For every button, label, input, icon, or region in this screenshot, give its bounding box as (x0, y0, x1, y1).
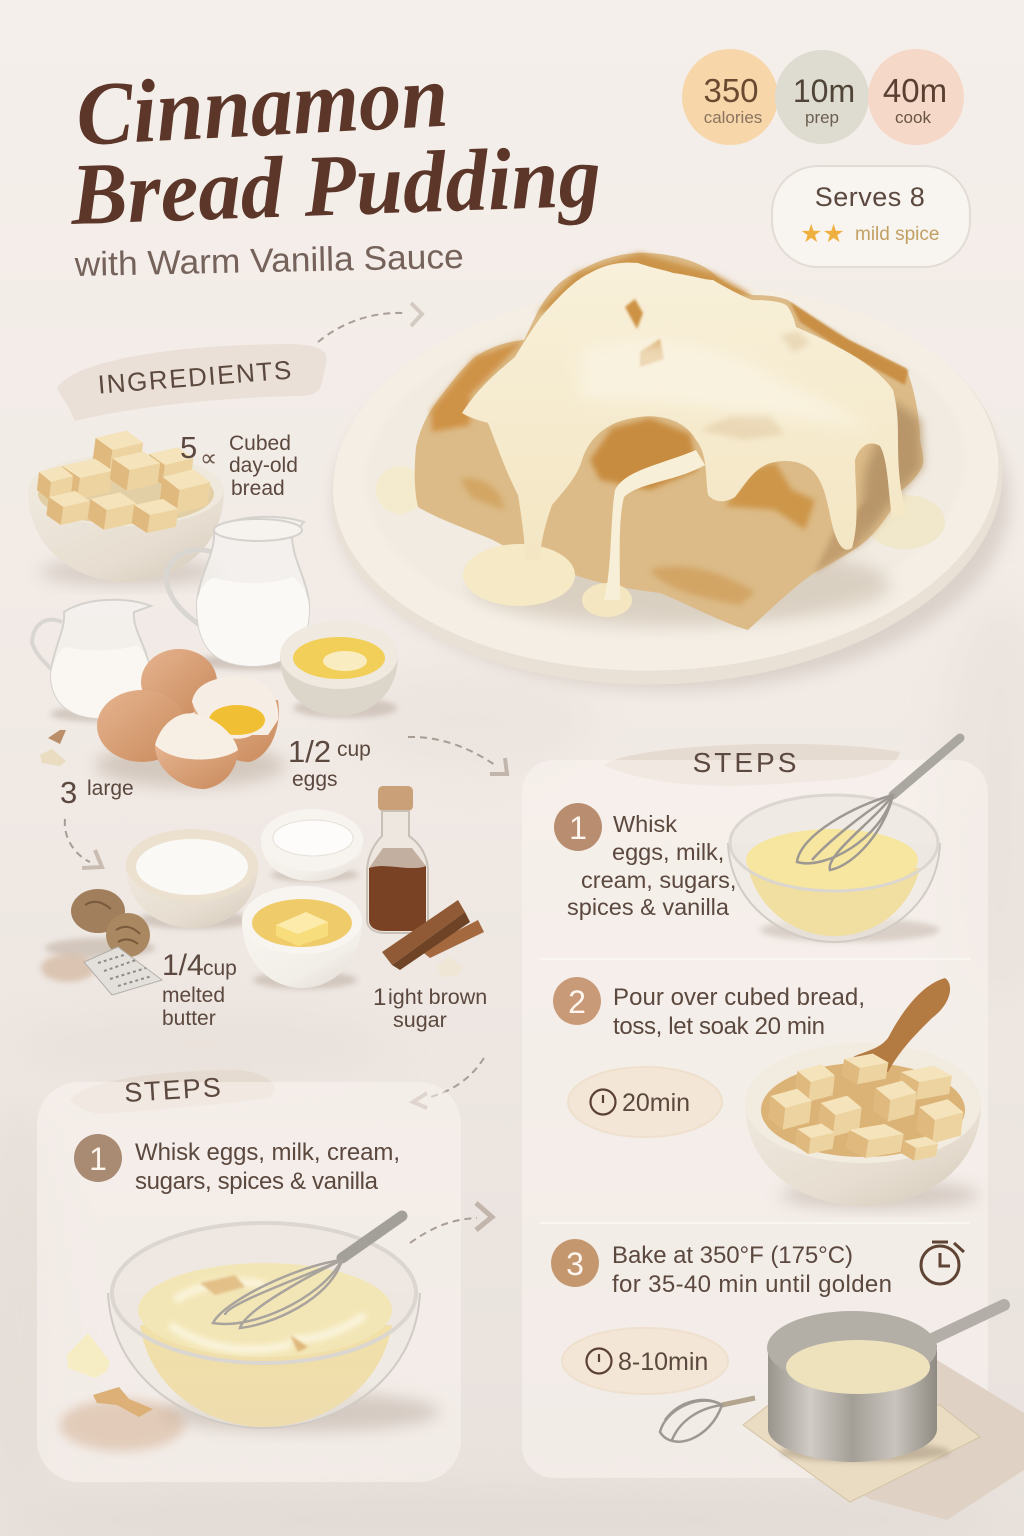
label: eggs (288, 734, 371, 791)
timer pill: 8-10min (618, 1348, 708, 1376)
badge: cook (868, 49, 964, 145)
heading: INGREDIENTS (97, 354, 294, 400)
number badge 1: 1 (89, 1141, 107, 1177)
label: 3 large (60, 775, 134, 810)
banner (603, 744, 900, 786)
panel: left steps (37, 1070, 461, 1482)
step text (567, 811, 736, 920)
timer pill (568, 1067, 722, 1137)
badge: cook: cook (895, 108, 931, 127)
ingredient: cinnamon sticks (382, 900, 484, 970)
spice stars: ★★ (800, 220, 845, 248)
label: bread: bread (231, 477, 285, 500)
icon: timer (921, 1242, 964, 1284)
step text: spices & vanilla (567, 894, 730, 920)
step text: for 35-40 min until golden (612, 1271, 892, 1298)
panel background (522, 760, 988, 1478)
glass bowl and whisk (728, 738, 960, 942)
label: eggs: cup (337, 738, 371, 761)
step text: Pour over cubed bread, (613, 984, 865, 1011)
wooden board (743, 1400, 980, 1502)
arrow: eggs to steps (408, 737, 507, 774)
spice powder (41, 954, 95, 982)
butter cube (67, 1333, 110, 1378)
banner (70, 1070, 275, 1114)
number badge (554, 803, 602, 851)
label: brown sugar: 1 (373, 984, 386, 1011)
cracked egg with yolk (192, 677, 279, 762)
label: bread: Cubed (229, 432, 291, 455)
step 2 (553, 977, 981, 1209)
step 3 (551, 1239, 1024, 1520)
number badge: 3 (566, 1246, 584, 1282)
saucepan (767, 1305, 1004, 1462)
badge: calories: calories (704, 108, 762, 127)
timer pill (562, 1328, 728, 1394)
label: butter: 1/4 (162, 949, 204, 982)
small whisk (660, 1398, 755, 1442)
subtitle: with Warm Vanilla Sauce (73, 238, 464, 284)
badge: cook: 40m (883, 72, 947, 109)
garlic crumb (437, 957, 463, 977)
label: bread: day-old (229, 454, 298, 477)
label: brown sugar: sugar (393, 1008, 447, 1032)
towel (800, 1360, 1024, 1520)
arrow: title to plate (318, 303, 422, 342)
label: butter (162, 949, 237, 1030)
label: eggs: eggs (292, 768, 338, 791)
label: butter: cup (203, 957, 237, 980)
label: brown sugar (373, 984, 487, 1032)
right sauce pool (865, 495, 945, 549)
label: 3 large: large (87, 777, 134, 800)
badge: prep: prep (805, 108, 839, 127)
nut crumbs (40, 730, 66, 766)
label: butter: butter (162, 1007, 216, 1030)
number badge 1 (74, 1134, 122, 1182)
label: butter: melted (162, 984, 225, 1007)
left sauce pool (376, 466, 424, 514)
panel: right steps (522, 738, 1024, 1520)
badge: calories: 350 (703, 72, 759, 109)
bowl of soaked bread with spoon (745, 978, 981, 1209)
step text (613, 984, 865, 1040)
title line: Bread Pudding: Bread Pudding (68, 129, 602, 244)
spice label: mild spice (855, 224, 939, 245)
label: bread: 5 (180, 430, 197, 465)
ingredient: bread cubes bowl (28, 431, 224, 586)
label: brown sugar: ight brown (388, 985, 487, 1009)
ingredient: nutmegs (45, 889, 155, 958)
plate with bread pudding (321, 253, 1013, 701)
badge: prep (775, 50, 869, 144)
divider glow (540, 1222, 970, 1224)
vanilla sauce (462, 263, 908, 617)
step text: Bake at 350°F (175°C) (612, 1242, 853, 1269)
label: bread (180, 430, 298, 500)
arrow: left panel to right panel (410, 1203, 492, 1243)
heading: STEPS (123, 1072, 224, 1108)
title line: Cinnamon: Cinnamon (74, 47, 451, 165)
heading: STEPS (693, 747, 799, 778)
pudding slice (415, 253, 923, 630)
pudding shadow (470, 545, 890, 625)
ingredient: sugar bowl (126, 829, 258, 929)
ingredient: small milk jug (32, 600, 151, 722)
number badge: 1 (569, 810, 587, 846)
serves text: Serves 8 (815, 182, 925, 212)
step text (612, 1242, 892, 1298)
serves card (772, 166, 970, 267)
label: bread: ∝ (200, 445, 217, 472)
step text: Whisk eggs, milk, cream, (135, 1139, 400, 1166)
number badge: 2 (568, 984, 586, 1020)
ingredient: vanilla bottle (367, 786, 428, 933)
timer pill: 20min (622, 1089, 690, 1117)
whole egg back (141, 649, 217, 715)
divider glow (540, 958, 970, 960)
step text: sugars, spices & vanilla (135, 1168, 379, 1195)
stat badges (682, 49, 964, 145)
ingredient: melted butter bowl (280, 621, 398, 718)
title (68, 47, 602, 284)
panel background (37, 1082, 461, 1482)
arrow: ingredients to left steps (413, 1058, 484, 1108)
badge: prep: 10m (793, 73, 855, 109)
label: eggs: 1/2 (288, 734, 331, 769)
plate shadow (334, 310, 1010, 690)
brush stroke (57, 344, 326, 421)
ingredient: butter bowl (242, 886, 362, 989)
ingredient: large milk jug (166, 517, 317, 670)
empty shell (155, 713, 238, 789)
step text: eggs, milk, (612, 839, 724, 865)
step text: Whisk (613, 811, 677, 837)
step text: toss, let soak 20 min (613, 1013, 825, 1040)
step 1 (554, 738, 960, 942)
glass bowl with custard and whisk (108, 1216, 440, 1432)
number badge (551, 1239, 599, 1287)
arrow: 3 large to bowls (65, 819, 102, 868)
ingredient: coconut bowl (261, 809, 363, 882)
crumbs and spice (60, 1387, 184, 1451)
step text (135, 1139, 400, 1195)
grater (84, 947, 162, 995)
label: 3 large: 3 (60, 775, 77, 810)
ingredients banner (57, 344, 326, 421)
step text: cream, sugars, (581, 867, 736, 893)
marble mottling (0, 600, 1024, 1536)
number badge (553, 977, 601, 1025)
badge: calories (682, 49, 778, 145)
plate (321, 267, 1013, 701)
ingredient: eggs (95, 649, 285, 789)
whole egg front (97, 690, 187, 762)
